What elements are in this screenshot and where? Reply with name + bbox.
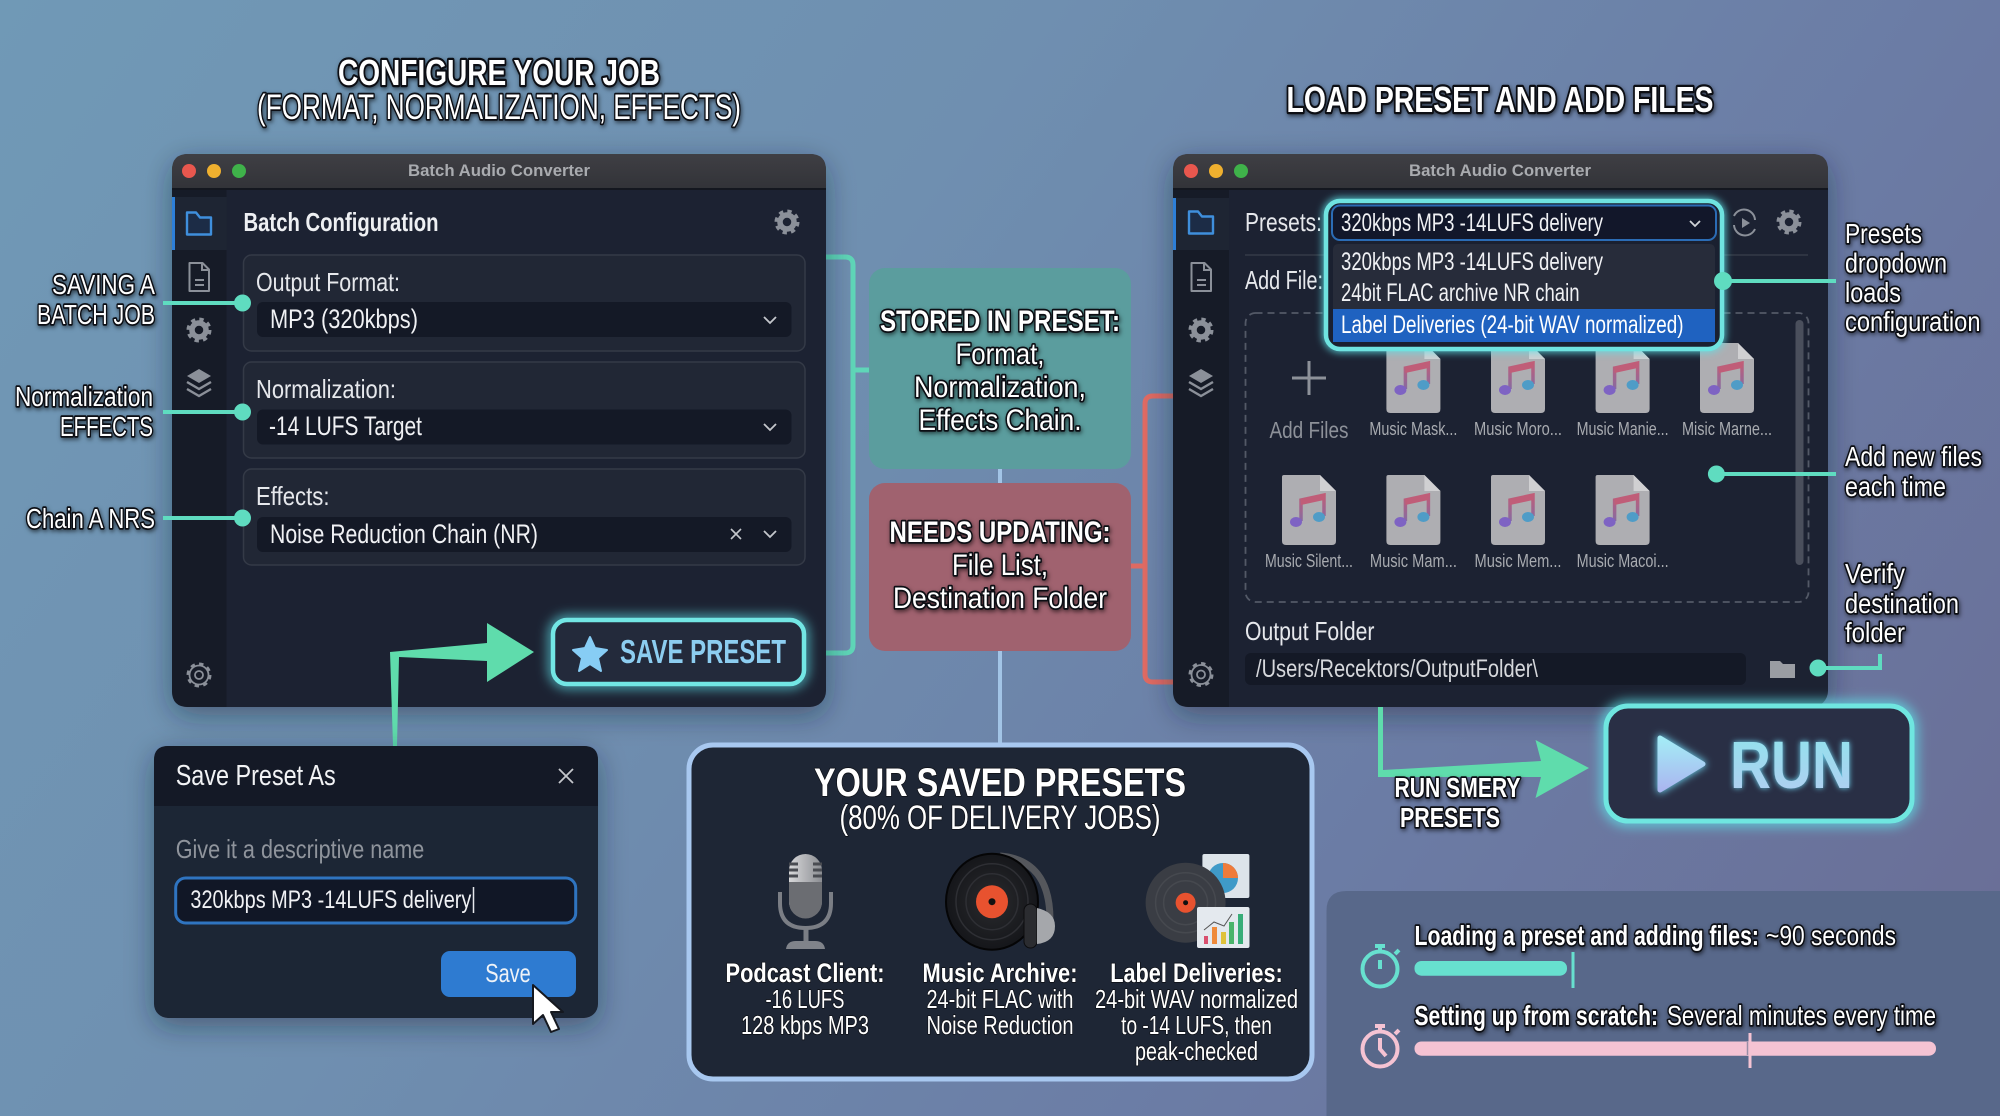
preset: music archive: Noise Reduction	[926, 1010, 1074, 1040]
callout: normalization effects: Normalization	[15, 381, 153, 412]
file tiles: Misic Marne...	[1682, 419, 1772, 439]
icon: microphone	[780, 854, 831, 949]
file tiles: Music Manie...	[1577, 419, 1669, 439]
label: run smery presets: PRESETS	[1400, 802, 1500, 833]
traffic lights	[1184, 164, 1248, 178]
heading: configure your job: CONFIGURE YOUR JOB	[338, 52, 660, 93]
preset: podcast client: Podcast Client:	[726, 958, 884, 988]
panel heading: batch configuration: Batch Configuration	[244, 207, 438, 237]
panel: left app window	[172, 154, 826, 707]
field: normalization	[244, 362, 805, 458]
preset: label deliveries: peak-checked	[1135, 1036, 1258, 1066]
row: setting up from scratch: Several minutes every time	[1667, 1000, 1936, 1031]
row: loading a preset	[1362, 920, 1896, 988]
panel: stored in preset: Effects Chain.	[918, 404, 1082, 437]
name input: 320kbps MP3 -14LUFS delivery	[190, 886, 472, 914]
window title: Batch Audio Converter	[408, 161, 590, 180]
heading: configure your job: (FORMAT, NORMALIZATION, EFFECTS)	[257, 88, 741, 127]
presets dropdown highlight: 320kbps MP3 -14LUFS delivery	[1341, 248, 1603, 276]
button: save preset	[553, 620, 804, 684]
panel: needs updating: NEEDS UPDATING:	[890, 516, 1110, 549]
preset: podcast client: -16 LUFS	[766, 984, 844, 1014]
field: normalization: -14 LUFS Target	[269, 411, 422, 441]
panel: timing comparison	[1326, 891, 2000, 1116]
preset: music archive: Music Archive:	[922, 958, 1078, 988]
panel: stored in preset: STORED IN PRESET:	[880, 305, 1120, 338]
preset: podcast client: 128 kbps MP3	[741, 1010, 869, 1040]
icon: stopwatch teal	[1362, 946, 1399, 986]
button: run: RUN	[1730, 728, 1853, 803]
button: save	[441, 951, 576, 997]
output folder: /Users/Recektors/OutputFolder\	[1256, 655, 1538, 683]
panel: needs updating: Destination Folder	[893, 582, 1107, 615]
callout: presets dropdown loads configuration: Presets	[1845, 218, 1922, 249]
sidebar icons	[1189, 212, 1213, 686]
button: run	[1606, 706, 1912, 821]
panel: stored in preset: Normalization,	[914, 371, 1086, 404]
file drop zone	[1246, 313, 1808, 602]
icon: stopwatch pink	[1362, 1026, 1399, 1066]
name input	[176, 878, 576, 923]
icon: settings gear	[776, 212, 798, 232]
icon: close	[559, 769, 573, 783]
icon: vinyl with charts	[1146, 854, 1250, 948]
preset: music archive: 24-bit FLAC with	[926, 984, 1074, 1014]
icon: refresh	[1734, 210, 1755, 235]
output folder: Output Folder	[1245, 616, 1375, 646]
field: normalization: Normalization:	[256, 374, 396, 404]
output folder	[1245, 616, 1795, 685]
field: output format: Output Format:	[256, 267, 400, 297]
callout: presets dropdown loads configuration	[1714, 218, 1980, 337]
row: loading a preset: Loading a preset and adding files:	[1414, 920, 1759, 951]
row: setting up from scratch: Setting up from scratch:	[1414, 1000, 1658, 1031]
file tiles: Music Mem...	[1474, 551, 1562, 571]
panel title	[814, 761, 1186, 837]
callout: presets dropdown loads configuration: dropdown	[1845, 248, 1947, 278]
dialog title: Save Preset As	[176, 760, 336, 792]
preset: label deliveries	[1095, 958, 1298, 1066]
panel: stored in preset	[869, 268, 1131, 469]
file tiles: Music Moro...	[1474, 419, 1562, 439]
heading: configure your job	[257, 52, 741, 127]
presets dropdown highlight: Label Deliveries (24-bit WAV normalized)	[1341, 311, 1684, 339]
presets dropdown highlight: 320kbps MP3 -14LUFS delivery	[1341, 209, 1603, 237]
callout: chain a nrs: Chain A NRS	[26, 503, 155, 534]
arrow: to run button	[1378, 707, 1589, 798]
button: save preset: SAVE PRESET	[620, 633, 786, 670]
callout: normalization effects	[15, 381, 251, 442]
file tiles: Music Macoi...	[1577, 551, 1669, 571]
panel: right app window	[1173, 154, 1828, 707]
icon: settings gear	[1778, 212, 1800, 232]
callout: verify destination folder: folder	[1845, 617, 1905, 648]
field: effects: Noise Reduction Chain (NR)	[270, 519, 538, 549]
add files tile	[1270, 361, 1348, 443]
callout: add new files each time: each time	[1845, 471, 1946, 502]
panel title: YOUR SAVED PRESETS	[814, 761, 1186, 805]
presets dropdown highlight	[1326, 201, 1722, 349]
preset: label deliveries: 24-bit WAV normalized	[1095, 984, 1298, 1014]
panel: save preset dialog	[154, 746, 598, 1018]
file tiles: Music Mam...	[1370, 551, 1457, 571]
panel: your saved presets	[689, 745, 1312, 1079]
field: output format: MP3 (320kbps)	[270, 304, 418, 334]
button: run: RUN	[1730, 728, 1853, 803]
arrow: dialog to save preset	[390, 623, 534, 746]
label: run smery presets	[1394, 772, 1521, 833]
connector: center spine	[998, 465, 1002, 745]
callout: verify destination folder: destination	[1845, 588, 1959, 619]
add files label: Add File:	[1245, 265, 1323, 295]
row: setting up from scratch	[1362, 1000, 1936, 1068]
callout: normalization effects: EFFECTS	[60, 411, 153, 442]
icon: mouse cursor	[533, 985, 563, 1032]
icon: vinyl with headphones	[946, 854, 1055, 950]
connector: stored-in-preset bracket	[806, 257, 869, 653]
heading: load preset and add files: LOAD PRESET AND ADD FILES	[1286, 79, 1714, 120]
presets dropdown highlight: 24bit FLAC archive NR chain	[1341, 279, 1580, 307]
panel: needs updating: File List,	[952, 549, 1048, 582]
callout: verify destination folder	[1810, 558, 1959, 676]
callout: saving a batch job: SAVING A	[52, 269, 155, 300]
field hint: Give it a descriptive name	[176, 834, 424, 864]
traffic lights	[182, 164, 246, 178]
add files tile: Add Files	[1270, 417, 1348, 443]
field: effects: Effects:	[256, 481, 330, 511]
preset: label deliveries: to -14 LUFS, then	[1121, 1010, 1272, 1040]
row: loading a preset: ~90 seconds	[1766, 920, 1896, 951]
button: save: Save	[485, 958, 531, 988]
preset: label deliveries: Label Deliveries:	[1110, 958, 1283, 988]
sidebar icons	[187, 212, 211, 686]
callout: add new files each time	[1708, 441, 1982, 502]
presets label: Presets:	[1245, 207, 1322, 237]
file tiles: Music Mask...	[1369, 419, 1457, 439]
panel title: (80% OF DELIVERY JOBS)	[840, 799, 1160, 837]
callout: saving a batch job: BATCH JOB	[37, 299, 155, 330]
label: run smery presets: RUN SMERY	[1394, 772, 1521, 803]
field: effects	[244, 469, 805, 565]
preset: podcast client	[726, 958, 884, 1040]
window title: Batch Audio Converter	[1409, 161, 1591, 180]
callout: saving a batch job	[37, 269, 251, 330]
callout: verify destination folder: Verify	[1845, 558, 1905, 589]
panel: needs updating	[869, 483, 1131, 651]
file tiles	[1265, 343, 1772, 571]
preset: music archive	[922, 958, 1078, 1040]
file tiles: Music Silent...	[1265, 551, 1353, 571]
panel: stored in preset: Format,	[956, 338, 1044, 371]
connector: needs-updating bracket	[1131, 396, 1174, 682]
callout: presets dropdown loads configuration: loads	[1845, 277, 1901, 308]
field: output format	[244, 255, 805, 351]
